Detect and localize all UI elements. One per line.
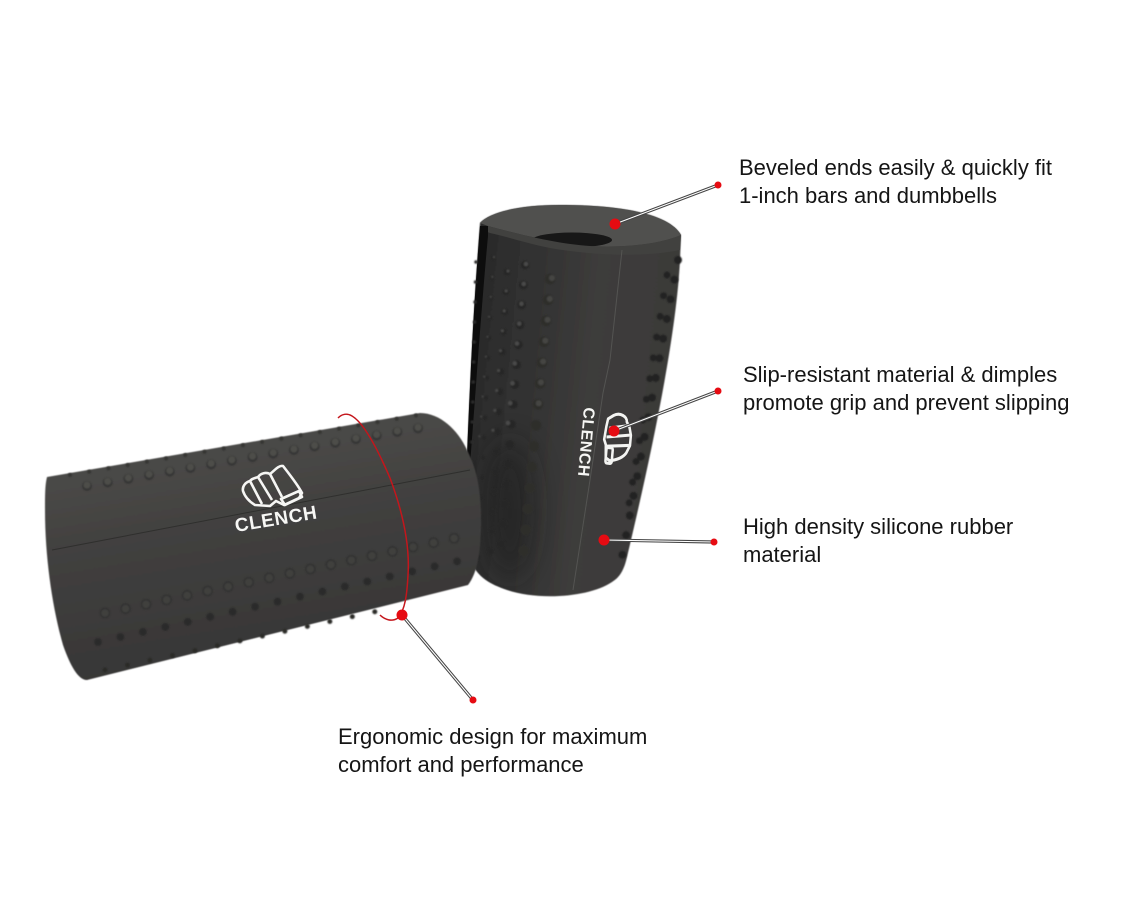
dark lower-left shading [493,451,536,586]
caption: bevelled ends: 1-inch bars and dumbbells [739,183,997,208]
product illustration with leader lines [44,182,722,704]
right grip cylinder [467,205,681,596]
caption: bevelled ends: Beveled ends easily & quickly fit [739,155,1052,180]
fist mark [602,413,633,465]
seam [573,250,622,590]
slit [467,226,488,465]
wordmark: CLENCH [233,502,319,537]
red circumference arc [338,414,408,620]
caption: ergonomic: comfort and performance [338,752,584,777]
caption: slip-resistant: promote grip and prevent slipping [743,390,1070,415]
right logo [574,407,633,478]
dimples [70,414,463,670]
caption: silicone: High density silicone rubber [743,514,1013,539]
wordmark: CLENCH [574,407,597,478]
caption: slip-resistant: Slip-resistant material & dimples [743,362,1057,387]
leader: ergonomic [396,610,476,704]
leader: bevelled ends [610,182,722,230]
dimples [470,257,678,560]
bevelled top face [480,205,681,247]
leader: silicone [598,534,718,546]
caption: silicone: material [743,542,821,567]
left logo [233,466,319,537]
leader: slip-resistant [608,388,722,436]
caption: silicone [743,514,1013,567]
caption: ergonomic: Ergonomic design for maximum [338,724,647,749]
caption: slip-resistant [743,362,1070,415]
caption: ergonomic [338,724,647,777]
seam [52,470,470,550]
left grip cylinder [45,413,481,680]
caption: bevelled ends [739,155,1052,208]
fist mark [243,466,302,506]
